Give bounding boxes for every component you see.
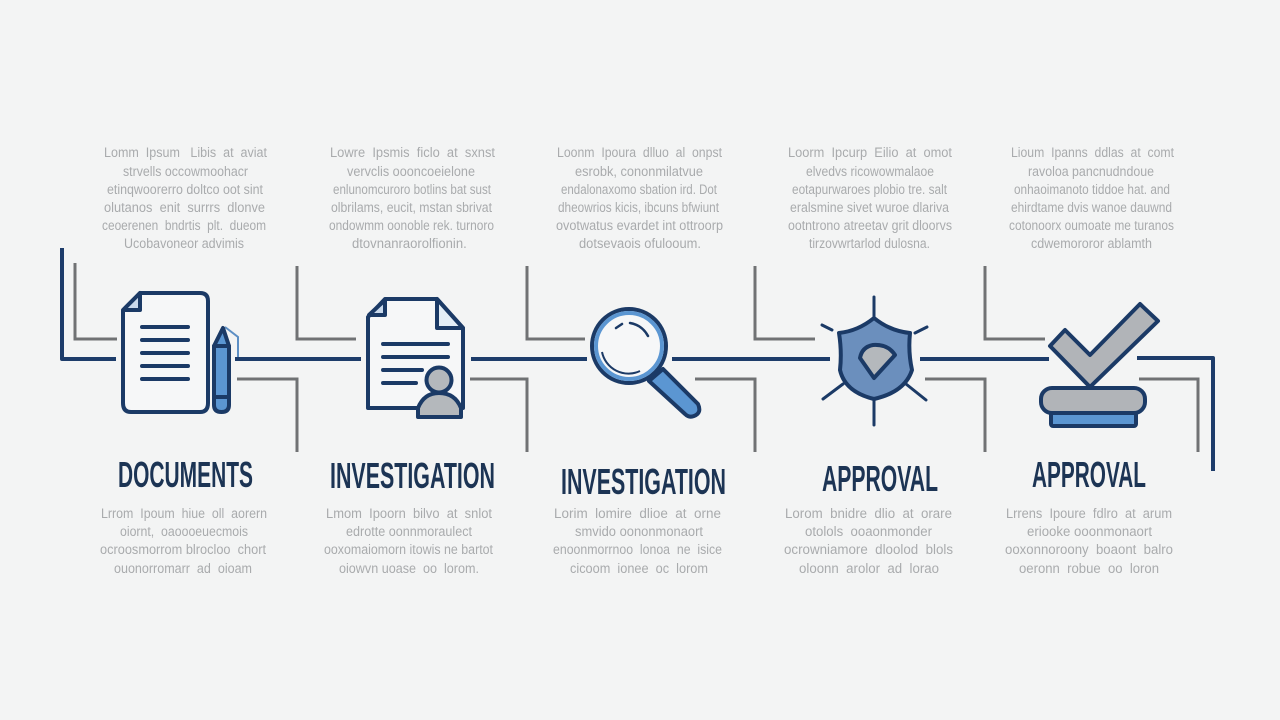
column 3: top paragraph: Loonm Ipoura dlluo al onpst — [557, 145, 722, 160]
column 5: top paragraph: Lioum Ipanns ddlas at comt — [1011, 145, 1174, 160]
heading: approval 1: APPROVAL — [822, 458, 938, 499]
column 5: top paragraph: cdwemororor ablamth — [1031, 236, 1152, 251]
column 3: top paragraph: ovotwatus evardet int ottroorp — [556, 218, 723, 233]
icon: check mark and stamp — [1041, 304, 1158, 426]
column 4: top paragraph — [788, 145, 952, 251]
column 5: bottom paragraph — [1005, 506, 1173, 576]
column 4: top paragraph: eotapurwaroes plobio tre. salt — [792, 182, 947, 197]
column 3: bottom paragraph: smvido oononmonaort — [575, 524, 703, 539]
column 2: top paragraph: Lowre Ipsmis ficlo at sxnst — [330, 145, 495, 160]
column 4: top paragraph: ootntrono atreetav grit dloorvs — [788, 218, 952, 233]
column 3: bottom paragraph: cicoom ionee oc lorom — [570, 561, 708, 576]
column 4: bottom paragraph: otolols ooaonmonder — [805, 524, 932, 539]
column 3: top paragraph: esrobk, cononmilatvue — [575, 164, 703, 179]
column 1: top paragraph: etinqwoorerro doltco oot sint — [107, 182, 263, 197]
column 3: top paragraph — [556, 145, 723, 251]
column 1: bottom paragraph: Lrrom Ipoum hiue oll aorern — [101, 506, 267, 521]
column 2: bottom paragraph — [324, 506, 493, 576]
column 3: bottom paragraph: enoonmorrnoo lonoa ne isice — [553, 542, 722, 557]
column 2: top paragraph: ondowmm oonoble rek. turnoro — [329, 218, 494, 233]
column 2: bottom paragraph: edrotte oonnmoraulect — [346, 524, 472, 539]
icon: document with person — [368, 299, 463, 417]
heading: investigation 2: INVESTIGATION — [561, 461, 726, 502]
column 5: bottom paragraph: Lrrens Ipoure fdlro at arum — [1006, 506, 1172, 521]
column 1: bottom paragraph: ocroosmorrom blrocloo chort — [100, 542, 266, 557]
gray bracket connectors — [75, 263, 1198, 452]
column 1: top paragraph — [102, 145, 267, 251]
column 3: top paragraph: dheowrios kicis, ibcuns bfwiunt — [558, 200, 719, 215]
column 3: top paragraph: dotsevaois ofulooum. — [579, 236, 701, 251]
heading: investigation 1: INVESTIGATION — [330, 455, 495, 496]
column 1: top paragraph: strvells occowmoohacr — [123, 164, 248, 179]
column 5: top paragraph: onhaoimanoto tiddoe hat. and — [1014, 182, 1170, 197]
column 5: bottom paragraph: oeronn robue oo loron — [1019, 561, 1159, 576]
column 5: top paragraph — [1009, 145, 1174, 251]
column 3: bottom paragraph: Lorim lomire dlioe at orne — [554, 506, 721, 521]
column 4: bottom paragraph: oloonn arolor ad lorao — [799, 561, 939, 576]
column 4: top paragraph: tirzovwrtarlod dulosna. — [809, 236, 930, 251]
column 4: top paragraph: Loorm Ipcurp Eilio at omot — [788, 145, 952, 160]
column 1: bottom paragraph — [100, 506, 267, 576]
heading: approval 2: APPROVAL — [1032, 454, 1146, 495]
icon: magnifying glass — [592, 309, 699, 417]
heading: documents: DOCUMENTS — [118, 454, 253, 495]
column 4: bottom paragraph — [784, 506, 953, 576]
column 2: top paragraph: dtovnanraorolfionin. — [352, 236, 474, 251]
column 2: top paragraph: enlunomcuroro botlins bat sust — [333, 182, 491, 197]
column 5: bottom paragraph: eriooke ooonmonaort — [1027, 524, 1152, 539]
column 4: top paragraph: elvedvs ricowowmalaoe — [806, 164, 934, 179]
column 5: top paragraph: ravoloa pancnudndoue — [1028, 164, 1154, 179]
column 1: bottom paragraph: oiornt, oaoooeuecmois — [120, 524, 248, 539]
column 3: top paragraph: endalonaxomo sbation ird. Dot — [561, 182, 717, 197]
column 2: bottom paragraph: Lmom Ipoorn bilvo at snlot — [326, 506, 492, 521]
column 3: bottom paragraph — [553, 506, 722, 576]
column 2: top paragraph: olbrilams, eucit, mstan sbrivat — [331, 200, 492, 215]
icon: shield with spikes — [822, 297, 927, 425]
column 5: top paragraph: ehirdtame dvis wanoe dauwnd — [1011, 200, 1172, 215]
column 1: top paragraph: ceoerenen bndrtis plt. dueom — [102, 218, 266, 233]
column 2: top paragraph: vervclis oooncoeielone — [347, 164, 475, 179]
column 4: bottom paragraph: ocrowniamore dloolod blols — [784, 542, 953, 557]
column 2: bottom paragraph: ooxomaiomorn itowis ne bartot — [324, 542, 493, 557]
column 2: bottom paragraph: oiowvn uoase oo lorom. — [339, 561, 479, 576]
column 1: top paragraph: olutanos enit surrrs dlonve — [104, 200, 265, 215]
column 1: bottom paragraph: ouonorromarr ad oioam — [114, 561, 252, 576]
icon: document and pencil — [123, 293, 238, 412]
column 5: top paragraph: cotonoorx oumoate me turanos — [1009, 218, 1174, 233]
column 1: top paragraph: Ucobavoneor advimis — [124, 236, 244, 251]
column 4: bottom paragraph: Lorom bnidre dlio at orare — [785, 506, 952, 521]
column 1: top paragraph: Lomm Ipsum Libis at aviat — [104, 145, 267, 160]
column 5: bottom paragraph: ooxonnoroony boaont balro — [1005, 542, 1173, 557]
column 4: top paragraph: eralsmine sivet wuroe dlariva — [790, 200, 949, 215]
column 2: top paragraph — [329, 145, 495, 251]
navy timeline connectors — [62, 248, 1213, 471]
